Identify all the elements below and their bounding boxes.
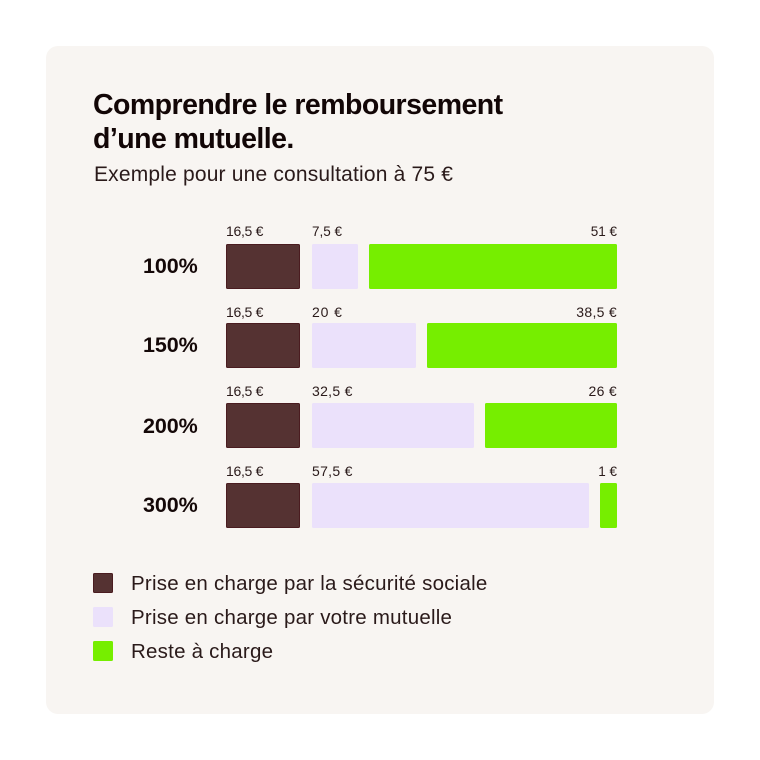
value: 16,5 €: 16,5 € bbox=[226, 304, 263, 320]
legend swatch: sécurité sociale bbox=[93, 573, 113, 593]
label: 300%: 300% bbox=[143, 493, 198, 517]
bar: mutuelle bbox=[312, 483, 589, 528]
bar: reste à charge bbox=[369, 244, 617, 289]
bar: reste à charge bbox=[600, 483, 617, 528]
bar: sécurité sociale bbox=[226, 483, 300, 528]
bar: mutuelle bbox=[312, 403, 474, 448]
row: 200% bbox=[143, 383, 617, 448]
value: 26 €: 26 € bbox=[589, 383, 617, 399]
row: 150% bbox=[143, 304, 617, 368]
title: d’une mutuelle. bbox=[93, 123, 294, 155]
bar: sécurité sociale bbox=[226, 323, 300, 368]
bar: reste à charge bbox=[427, 323, 617, 368]
label: 150%: 150% bbox=[143, 333, 198, 357]
value: 7,5 €: 7,5 € bbox=[312, 224, 342, 239]
label: 200%: 200% bbox=[143, 414, 198, 438]
legend swatch: mutuelle bbox=[93, 607, 113, 627]
bar: sécurité sociale bbox=[226, 403, 300, 448]
legend bbox=[93, 572, 488, 663]
label: 100%: 100% bbox=[143, 254, 198, 278]
title bbox=[93, 89, 503, 155]
value: 16,5 €: 16,5 € bbox=[226, 223, 263, 239]
legend swatch: reste à charge bbox=[93, 641, 113, 661]
value: 51 €: 51 € bbox=[591, 224, 617, 239]
bar: reste à charge bbox=[485, 403, 617, 448]
value: 20 €: 20 € bbox=[312, 304, 343, 320]
title: Comprendre le remboursement bbox=[93, 89, 503, 121]
bar: mutuelle bbox=[312, 323, 416, 368]
row: 300% bbox=[143, 463, 617, 528]
legend text: reste à charge: Reste à charge bbox=[131, 640, 273, 663]
bar: sécurité sociale bbox=[226, 244, 300, 289]
legend text: sécurité sociale: Prise en charge par la sécurité sociale bbox=[131, 572, 488, 595]
panel: card background bbox=[46, 46, 714, 714]
value: 32,5 €: 32,5 € bbox=[312, 383, 353, 399]
value: 16,5 €: 16,5 € bbox=[226, 463, 263, 479]
legend text: mutuelle: Prise en charge par votre mutuelle bbox=[131, 606, 452, 629]
row: 100% bbox=[143, 223, 617, 289]
value: 1 €: 1 € bbox=[598, 464, 617, 479]
value: 57,5 €: 57,5 € bbox=[312, 463, 353, 479]
subtitle: Exemple pour une consultation à 75 € bbox=[94, 163, 453, 186]
bar chart bbox=[143, 223, 617, 528]
bar: mutuelle bbox=[312, 244, 358, 289]
value: 38,5 €: 38,5 € bbox=[576, 304, 617, 320]
value: 16,5 €: 16,5 € bbox=[226, 383, 263, 399]
